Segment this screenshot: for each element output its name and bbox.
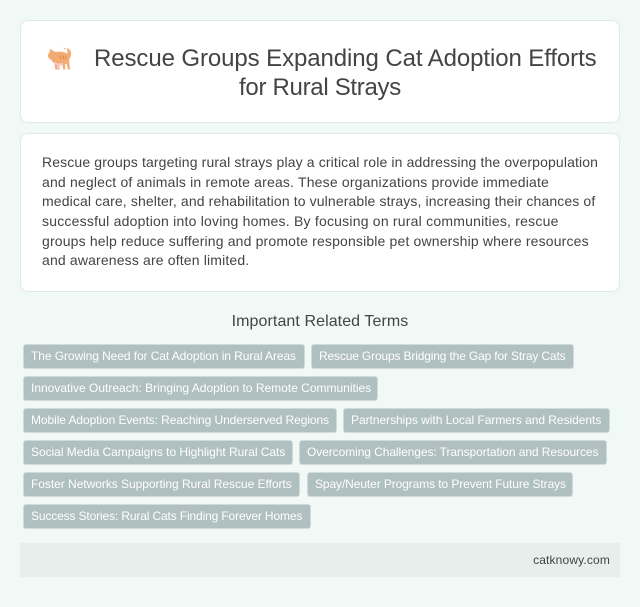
tag: [311, 344, 574, 369]
tag: Innovative Outreach: Bringing Adoption to Remote Communities: [31, 381, 371, 395]
tag: Foster Networks Supporting Rural Rescue Efforts: [31, 477, 292, 491]
text block: description: groups help reduce suffering and promote responsible pet ownership where resources: [42, 233, 589, 249]
tag: Overcoming Challenges: Transportation and Resources: [307, 445, 598, 459]
tag: [23, 376, 378, 401]
tag: Rescue Groups Bridging the Gap for Stray Cats: [319, 349, 565, 363]
panel: description card: [20, 133, 620, 292]
text block: description: medical care, shelter, and rehabilitation to vulnerable strays, increasing their chances of: [42, 193, 595, 209]
text block: description: and awareness are often limited.: [42, 252, 249, 268]
footer text: site name: catknowy.com: [533, 553, 610, 567]
heading: title: [94, 45, 597, 101]
text block: description: successful adoption into loving homes. By focusing on rural communities, rescue: [42, 213, 559, 229]
panel: title card: [20, 20, 620, 123]
tag: Social Media Campaigns to Highlight Rural Cats: [31, 445, 285, 459]
tag: [307, 472, 573, 497]
tag: Spay/Neuter Programs to Prevent Future Strays: [315, 477, 566, 491]
tag: [23, 408, 337, 433]
tag: [343, 408, 610, 433]
text block: description: and neglect of animals in remote areas. These organizations provide immediate: [42, 174, 549, 190]
tag: [23, 344, 305, 369]
heading: title: Rescue Groups Expanding Cat Adoption Efforts: [94, 45, 597, 72]
heading: title: for Rural Strays: [239, 74, 401, 101]
icon: orange cat: [48, 47, 72, 70]
tag: Success Stories: Rural Cats Finding Forever Homes: [31, 509, 302, 523]
tag: [299, 440, 607, 465]
tag: Mobile Adoption Events: Reaching Underserved Regions: [31, 413, 329, 427]
tag: [23, 472, 300, 497]
panel: related term tags: [23, 344, 610, 529]
tag: [23, 504, 311, 529]
tag: The Growing Need for Cat Adoption in Rural Areas: [31, 349, 296, 363]
text block: description: Rescue groups targeting rural strays play a critical role in addressing the overpopulation: [42, 154, 598, 170]
tag: Partnerships with Local Farmers and Residents: [351, 413, 601, 427]
footer bar: [20, 543, 620, 577]
tag: [23, 440, 293, 465]
text block: description: [42, 154, 598, 268]
heading: important related terms: Important Related Terms: [232, 313, 408, 330]
